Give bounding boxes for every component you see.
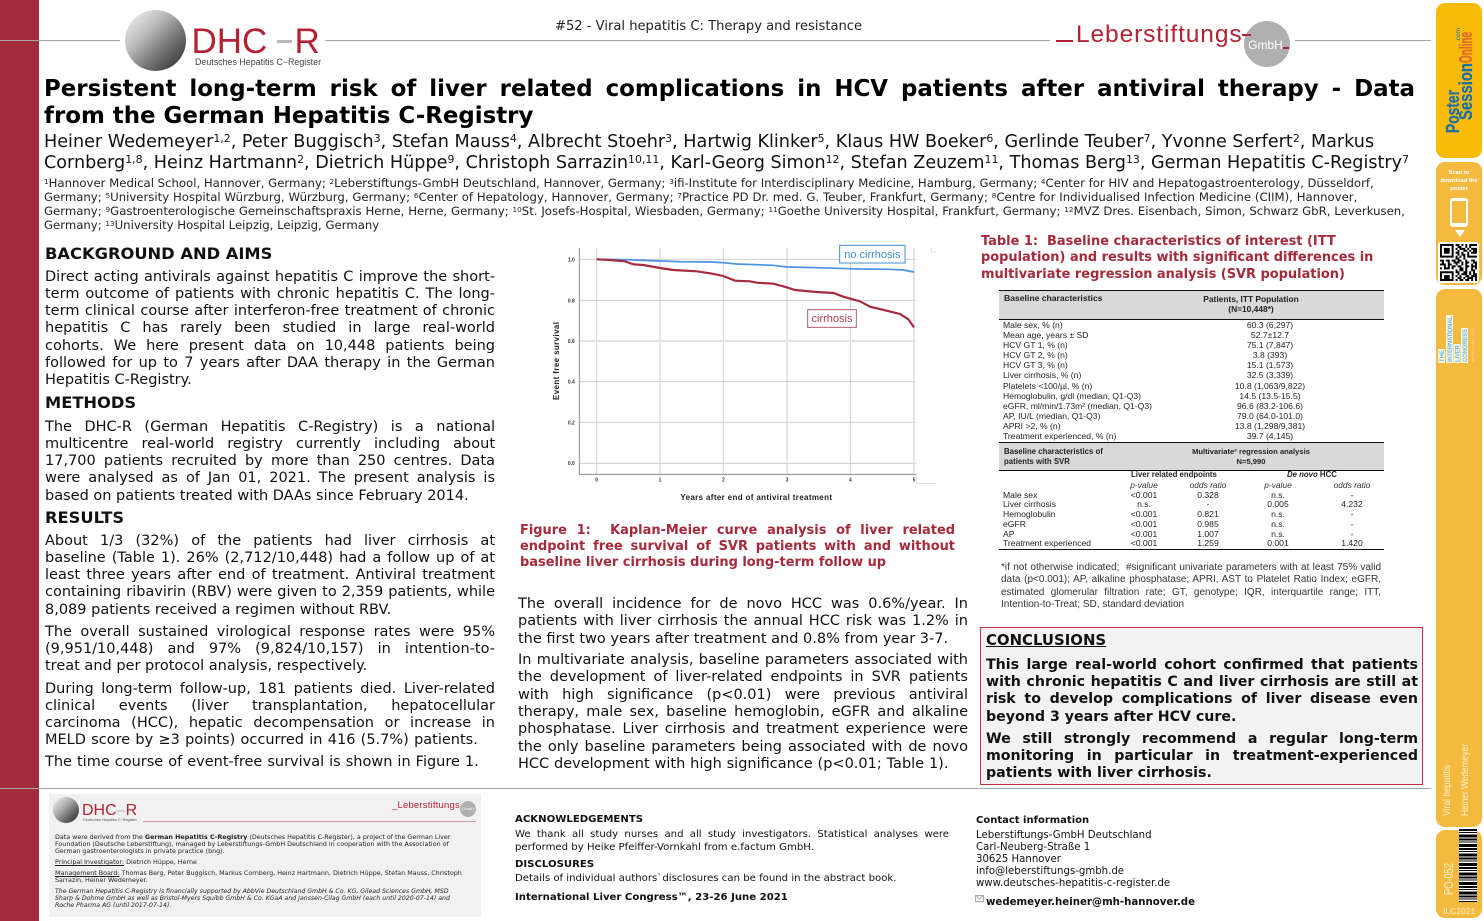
side panel: congress and topic bbox=[1436, 289, 1482, 827]
panel: conclusions bbox=[980, 627, 1423, 785]
scan caption bbox=[1436, 169, 1482, 193]
curve: no cirrhosis bbox=[597, 259, 914, 272]
contact details: Carl-Neuberg-Straße 1 bbox=[976, 842, 1090, 853]
x axis tick labels bbox=[595, 478, 916, 484]
label: no cirrhosis bbox=[840, 245, 905, 263]
text: methods: multicentre real-world registry currently including about bbox=[45, 436, 495, 452]
congress name: International Liver Congress™, 23-26 June 2021 bbox=[515, 892, 788, 902]
row labels: Treatment experienced, % (n) bbox=[1003, 431, 1116, 441]
affiliations bbox=[44, 176, 1405, 232]
multivariate column 4 bbox=[1341, 490, 1363, 548]
table caption: Table 1: Baseline characteristics of interest (ITT bbox=[981, 234, 1336, 248]
panel: registry information bbox=[49, 794, 481, 917]
multivariate column 1: <0.001 bbox=[1131, 538, 1157, 548]
y axis tick labels: 0.6 bbox=[568, 339, 575, 345]
R wordmark: R bbox=[294, 22, 320, 60]
row labels: Male sex, % (n) bbox=[1003, 320, 1063, 330]
figure caption: baseline liver cirrhosis during long-term follow up bbox=[520, 554, 886, 570]
y axis tick labels: 0.4 bbox=[568, 380, 575, 386]
multivariate column 2 bbox=[1197, 490, 1219, 548]
contact heading: Contact information bbox=[976, 815, 1089, 826]
x axis tick labels: 1 bbox=[659, 478, 662, 484]
registry description: Foundation (Deutsche Leberstiftung), managed by Leberstiftungs-GmbH Deutschland in cooperation with the Association of bbox=[55, 841, 449, 848]
text: multivariate analysis: with high significance (p<0.01) were previous antiviral bbox=[518, 687, 968, 703]
text: results paragraph 2: The overall sustained virological response rates were 95% bbox=[45, 624, 495, 640]
contact details bbox=[976, 830, 1170, 889]
congress logo: THE bbox=[1440, 350, 1446, 362]
text: HCC incidence: the first two years after treatment and 0.8% from year 3-7. bbox=[518, 631, 948, 647]
mini DHC-R wordmark: DHC–R bbox=[82, 802, 137, 819]
side panel: scan to download bbox=[1436, 162, 1482, 285]
header 2 left: patients with SVR bbox=[1004, 457, 1070, 466]
multivariate column 1: <0.001 bbox=[1131, 528, 1157, 538]
mini grey circle bbox=[460, 801, 476, 817]
contact details: 30625 Hannover bbox=[976, 854, 1061, 865]
text: results paragraph 4: The time course of event-free survival is shown in Figure 1. bbox=[45, 754, 479, 770]
text: results paragraph 2: treat and per protocol analysis, respectively. bbox=[45, 658, 367, 674]
row values: 60.3 (6,297) bbox=[1247, 320, 1293, 330]
multivariate column 4: - bbox=[1351, 528, 1353, 538]
row values: 96.6 (83.2-106.6) bbox=[1237, 401, 1303, 411]
row values: 3.8 (393) bbox=[1253, 350, 1287, 360]
figure caption: Figure 1: Kaplan-Meier curve analysis of liver related bbox=[520, 522, 955, 538]
figure caption bbox=[520, 522, 955, 570]
row values: 15.1 (1,573) bbox=[1247, 360, 1293, 370]
header 2 right bbox=[1192, 447, 1310, 466]
row labels: eGFR, ml/min/1.73m² (median, Q1-Q3) bbox=[1003, 401, 1152, 411]
multivariate column 3: n.s. bbox=[1271, 490, 1285, 500]
congress logo: 18-26 JUNE 2021 bbox=[1470, 327, 1475, 362]
row labels: Liver cirrhosis, % (n) bbox=[1003, 370, 1081, 380]
contact email: wedemeyer.heiner@mh-hannover.de bbox=[986, 897, 1195, 908]
topic text: Viral hepatitis bbox=[1441, 765, 1453, 816]
table caption bbox=[981, 234, 1373, 282]
text: background bbox=[45, 268, 495, 388]
sub headers: p-value bbox=[1264, 480, 1292, 490]
text: multivariate analysis: phosphatase. Liver cirrhosis and treatment experience were bbox=[518, 721, 968, 737]
row values: 79.0 (64.0-101.0) bbox=[1237, 411, 1303, 421]
text: methods: based on patients treated with DAAs since February 2014. bbox=[45, 488, 469, 504]
y axis title: Event free survival bbox=[552, 322, 561, 400]
row labels: Hemoglobulin, g/dl (median, Q1-Q3) bbox=[1003, 391, 1141, 401]
contact details: info@leberstiftungs-gmbh.de bbox=[976, 866, 1124, 877]
header band 2 bbox=[999, 442, 1384, 471]
logo dash bbox=[1056, 40, 1073, 42]
left red sidebar bbox=[0, 0, 39, 921]
affiliations: Germany; 5University Hospital Würzburg, Würzburg, Germany; 6Center of Hepatology, Hannover, Germany; 7Practice PD Dr. med. G. Teuber, Frankfurt, Germany; 8Centre for Individualised Infection Medicine (CIIM), Hannover, bbox=[44, 190, 1357, 204]
multivariate column 3: n.s. bbox=[1271, 528, 1285, 538]
multivariate column 4: - bbox=[1351, 490, 1353, 500]
text: background: Direct acting antivirals against hepatitis C improve the short- bbox=[45, 268, 495, 284]
acknowledgements text: We thank all study nurses and all study investigators. Statistical analyses were bbox=[515, 829, 949, 840]
management board: Sarrazin, Heiner Wedemeyer. bbox=[55, 877, 148, 884]
header 2 right: N=5,990 bbox=[1237, 457, 1265, 466]
header 1 right: (N=10,448*) bbox=[1228, 304, 1274, 314]
icon: down arrow bbox=[1455, 230, 1465, 237]
congress logo: LIVER bbox=[1456, 344, 1462, 362]
funding note: The German Hepatitis C-Registry is financially supported by AbbVie Deutschland GmbH & Co. KG, Gilead Sciences GmbH, MSD bbox=[55, 888, 449, 894]
multivariate column 2: 1.007 bbox=[1197, 528, 1219, 538]
multivariate row labels: eGFR bbox=[1003, 519, 1026, 529]
table footnote: estimated glomerular filtration rate; GT, genotype; IQR, interquartile range; ITT, bbox=[1001, 587, 1381, 598]
header 1 right bbox=[1203, 294, 1299, 314]
multivariate column 2: - bbox=[1207, 499, 1209, 509]
conclusions text 1: with chronic hepatitis C and liver cirrhosis are still at bbox=[986, 674, 1418, 690]
principal investigator: Principal Investigator: Dietrich Hüppe, Herne bbox=[55, 859, 197, 866]
authors: Cornberg1,8, Heinz Hartmann2, Dietrich Hüppe9, Christoph Sarrazin10,11, Karl-Georg Simon12, Stefan Zeuzem11, Thomas Berg13, German Hepatitis C-Registry7 bbox=[44, 153, 1409, 173]
text: multivariate analysis bbox=[518, 652, 968, 772]
y axis tick labels: 1.0 bbox=[568, 257, 575, 263]
conclusions text 2 bbox=[986, 730, 1418, 781]
brand wordmark bbox=[1436, 3, 1482, 158]
icon: grey sphere bbox=[125, 10, 186, 71]
multivariate column 4: 1.420 bbox=[1341, 538, 1363, 548]
text: multivariate analysis: the development of liver-related endpoints in SVR patients bbox=[518, 669, 968, 685]
acknowledgements text: performed by Heike Pfeiffer-Vornkahl from e.factum GmbH. bbox=[515, 842, 814, 853]
mini grey circle: GmbH bbox=[462, 806, 474, 811]
text: results paragraph 3 bbox=[45, 680, 495, 748]
label: cirrhosis bbox=[808, 310, 856, 327]
row values bbox=[1235, 320, 1305, 441]
text: multivariate analysis: therapy, male sex, baseline hemoglobin, eGFR and alkaline bbox=[518, 704, 968, 720]
row values: 52.7±12.7 bbox=[1251, 330, 1289, 340]
header 2 left: Baseline characteristics of bbox=[1004, 447, 1103, 456]
x axis title: Years after end of antiviral treatment bbox=[680, 493, 832, 502]
text: results paragraph 1: baseline (Table 1). 26% (2,712/10,448) had a follow up of at bbox=[45, 550, 495, 566]
heading: methods: METHODS bbox=[45, 393, 136, 412]
management board bbox=[55, 870, 462, 884]
text: methods: 17,700 patients recruited by more than 250 centres. Data bbox=[45, 453, 495, 469]
text: results paragraph 1 bbox=[45, 532, 495, 618]
row values: 75.1 (7,847) bbox=[1247, 340, 1293, 350]
conclusions text 1 bbox=[986, 656, 1418, 725]
text: results paragraph 2 bbox=[44, 624, 495, 674]
y axis tick labels: 0.2 bbox=[568, 420, 575, 426]
text: multivariate analysis: HCC development with high significance (p<0.01; Table 1). bbox=[518, 756, 948, 772]
x axis tick labels: 4 bbox=[849, 478, 852, 484]
header 2 right: Multivariate# regression analysis bbox=[1192, 447, 1310, 456]
affiliations: 1Hannover Medical School, Hannover, Germany; 2Leberstiftungs-GmbH Deutschland, Hannover, Germany; 3ifi-Institute for Interdisciplinary Medicine, Hamburg, Germany; 4Center for HIV and Hepatogastroenterology, Düsseldorf, bbox=[44, 176, 1374, 190]
row labels: APRI >2, % (n) bbox=[1003, 421, 1061, 431]
multivariate row labels: Hemoglobulin bbox=[1003, 509, 1056, 519]
logo: DHC-R bbox=[125, 10, 321, 71]
text: results paragraph 2: (9,951/10,448) and 97% (9,824/10,157) in intention-to- bbox=[45, 641, 495, 657]
congress logo: INTERNATIONAL bbox=[1448, 316, 1454, 362]
logo hyphen bbox=[1242, 34, 1251, 36]
table footnote: *if not otherwise indicated; #significant univariate parameters with at least 75% valid bbox=[1001, 562, 1381, 573]
barcode bbox=[1459, 829, 1477, 902]
conclusions text 2: patients with liver cirrhosis. bbox=[986, 765, 1212, 781]
heading: background and aims: BACKGROUND AND AIMS bbox=[45, 244, 272, 263]
multivariate column 1: <0.001 bbox=[1131, 490, 1157, 500]
multivariate column 3: 0.005 bbox=[1267, 499, 1289, 509]
multivariate column 1: <0.001 bbox=[1131, 519, 1157, 529]
affiliations: Germany; 13University Hospital Leipzig, Leipzig, Germany bbox=[44, 218, 379, 232]
funding note: Sharp & Dohme GmbH as well as Bristol-Myers Squibb GmbH & Co. KGaA and Janssen-Cilag GmbH (each until 2020-07-14) and bbox=[55, 895, 450, 902]
row labels: AP, IU/L (median, Q1-Q3) bbox=[1003, 411, 1100, 421]
multivariate column 4: - bbox=[1351, 519, 1353, 529]
multivariate column 2: 0.985 bbox=[1197, 519, 1219, 529]
sub headers bbox=[1130, 480, 1370, 490]
conclusions text 1: This large real-world cohort confirmed that patients bbox=[986, 656, 1418, 672]
table footnote: Intention-to-Treat; SD, standard deviation bbox=[1001, 599, 1184, 610]
logo: Leberstiftungs-GmbH bbox=[1056, 21, 1290, 67]
y axis tick labels: 0.0 bbox=[568, 461, 575, 467]
management board: Management Board: Thomas Berg, Peter Buggisch, Markus Cornberg, Heinz Hartmann, Dietrich Hüppe, Stefan Mauss, Christoph bbox=[55, 870, 462, 877]
text: results paragraph 3: clinical events (liver transplantation, hepatocellular bbox=[45, 698, 495, 714]
header 1 left: Baseline characteristics bbox=[1004, 293, 1102, 303]
poster ID: PO-052 bbox=[1441, 863, 1456, 895]
conclusions text 2: monitoring in particular in treatment-experienced bbox=[986, 748, 1418, 764]
title bbox=[44, 76, 1415, 129]
title: from the German Hepatitis C-Registry bbox=[44, 103, 533, 129]
header band 1 bbox=[999, 290, 1384, 320]
brand wordmark: .com bbox=[1456, 28, 1462, 42]
y axis tick labels bbox=[568, 257, 575, 467]
row values: 13.8 (1,298/9,381) bbox=[1235, 421, 1305, 431]
contact details: www.deutsches-hepatitis-c-register.de bbox=[976, 878, 1170, 889]
multivariate row labels bbox=[1003, 490, 1091, 548]
logo grey dash bbox=[277, 40, 292, 42]
grey circle GmbH: GmbH bbox=[1248, 38, 1283, 52]
multivariate column 4: 4.232 bbox=[1341, 499, 1363, 509]
text: background: hepatitis C has rarely been studied in large real-world bbox=[45, 320, 495, 336]
mini Leberstiftungs wordmark: _Leberstiftungs bbox=[392, 800, 460, 811]
header 2 left bbox=[1004, 447, 1103, 466]
multivariate column 1: <0.001 bbox=[1131, 509, 1157, 519]
text: background: Hepatitis C-Registry. bbox=[45, 372, 192, 388]
multivariate row labels: AP bbox=[1003, 528, 1014, 538]
registry description: Data were derived from the German Hepatitis C-Registry (Deutsches Hepatitis C-Register), a project of the German Liver bbox=[55, 834, 450, 841]
table footnote: data (p<0.001); AP, alkaline phosphatase; APRI, AST to Platelet Ratio Index; eGFR, bbox=[1001, 574, 1381, 585]
multivariate column 3: n.s. bbox=[1271, 509, 1285, 519]
multivariate column 2: 1.259 bbox=[1197, 538, 1219, 548]
QR code bbox=[1438, 242, 1479, 283]
conclusions text 1: beyond 3 years after HCV cure. bbox=[986, 709, 1236, 725]
text: results paragraph 1: About 1/3 (32%) of the patients had liver cirrhosis at bbox=[45, 532, 495, 548]
text: methods: The DHC-R (German Hepatitis C-Registry) is a national bbox=[45, 418, 495, 434]
text: background: term clinical course after interferon-free treatment of chronic bbox=[45, 303, 495, 319]
text: multivariate analysis: In multivariate analysis, baseline parameters associated with bbox=[518, 652, 968, 668]
group headers: Liver related endpoints bbox=[1131, 470, 1217, 478]
multivariate column 1 bbox=[1131, 490, 1157, 548]
title: Persistent long-term risk of liver related complications in HCV patients after antiviral therapy - Data bbox=[44, 76, 1415, 102]
mini rule bbox=[143, 821, 476, 822]
conference track label: #52 - Viral hepatitis C: Therapy and resistance bbox=[555, 19, 862, 34]
header 1 right: Patients, ITT Population bbox=[1203, 294, 1299, 304]
row labels: HCV GT 1, % (n) bbox=[1003, 340, 1068, 350]
conclusions heading: CONCLUSIONS bbox=[986, 631, 1106, 649]
conclusions text 1: risk to develop complications of liver disease even bbox=[986, 691, 1418, 707]
side panel: poster number bbox=[1436, 830, 1482, 918]
brand wordmark: Online bbox=[1456, 32, 1476, 63]
affiliations: Germany; 9Gastroenterologische Gemeinschaftspraxis Herne, Herne, Germany; 10St. Josefs-Hospital, Wiesbaden, Germany; 11Goethe University Hospital, Frankfurt, Germany; 12MVZ Dres. Eisenbach, Simon, Schwarz GbR, Leverkusen, bbox=[44, 204, 1405, 218]
text: results paragraph 1: least three years after end of treatment. Antiviral treatment bbox=[45, 567, 495, 583]
logo subtitle: Deutsches Hepatitis C−Register bbox=[195, 57, 321, 67]
mini logo subtitle: Deutsches Hepatitis C−Register bbox=[83, 818, 137, 822]
funding note: Roche Pharma AG (until 2017-07-14). bbox=[55, 902, 171, 909]
label: cirrhosis: cirrhosis bbox=[812, 313, 853, 325]
multivariate column 3: n.s. bbox=[1271, 519, 1285, 529]
text: results paragraph 3: carcinoma (HCC), hepatic decompensation or increase in bbox=[45, 715, 495, 731]
registry description bbox=[55, 834, 450, 855]
acknowledgements text bbox=[515, 829, 949, 853]
heading: results: RESULTS bbox=[45, 508, 124, 527]
table: baseline characteristics bbox=[999, 290, 1384, 550]
Leberstiftungs wordmark: Leberstiftungs bbox=[1076, 21, 1243, 48]
multivariate column 3: 0.001 bbox=[1267, 538, 1289, 548]
row values: 14.5 (13.5-15.5) bbox=[1239, 391, 1301, 401]
funding note bbox=[55, 888, 450, 909]
conclusions text 2: We still strongly recommend a regular long-term bbox=[986, 730, 1418, 746]
multivariate column 1: n.s. bbox=[1137, 499, 1151, 509]
topic text bbox=[1436, 729, 1482, 819]
row labels: HCV GT 3, % (n) bbox=[1003, 360, 1068, 370]
row labels bbox=[1003, 320, 1152, 441]
congress code: ILC2021 bbox=[1443, 907, 1475, 916]
icon: phone bbox=[1450, 198, 1468, 227]
text: results paragraph 3: During long-term follow-up, 181 patients died. Liver-related bbox=[45, 680, 495, 696]
x axis tick labels: 5 bbox=[913, 478, 916, 484]
row values: 32.5 (3,339) bbox=[1247, 370, 1293, 380]
brand wordmark: Session bbox=[1456, 63, 1476, 120]
row labels: Platelets <100/µl, % (n) bbox=[1003, 381, 1092, 391]
contact details: Leberstiftungs-GmbH Deutschland bbox=[976, 830, 1152, 841]
text: HCC incidence: patients with liver cirrhosis the annual HCC risk was 1.2% in bbox=[518, 613, 968, 629]
registry description: German gastroenterologists in private practice (bng). bbox=[55, 848, 225, 855]
DHC wordmark: DHC bbox=[192, 22, 267, 60]
text: HCC incidence: The overall incidence for de novo HCC was 0.6%/year. In bbox=[518, 596, 968, 612]
text: methods bbox=[44, 418, 495, 504]
scan caption: download the bbox=[1440, 178, 1478, 184]
multivariate column 2: 0.821 bbox=[1197, 509, 1219, 519]
multivariate column 2: 0.328 bbox=[1197, 490, 1219, 500]
disclosures text: Details of individual authors`disclosures can be found in the abstract book. bbox=[515, 872, 897, 884]
table caption: population) and results with significant differences in bbox=[981, 250, 1373, 265]
text: background: followed for up to 7 years after DAA therapy in the German bbox=[45, 355, 495, 371]
table caption: multivariate regression analysis (SVR population) bbox=[981, 267, 1345, 282]
table footnote bbox=[1001, 562, 1381, 610]
sub headers: odds ratio bbox=[1190, 480, 1226, 490]
x axis tick labels: 2 bbox=[722, 478, 725, 484]
multivariate column 4: - bbox=[1351, 509, 1353, 519]
text: HCC incidence bbox=[518, 596, 968, 647]
row labels: HCV GT 2, % (n) bbox=[1003, 350, 1068, 360]
scan caption: Scan to bbox=[1449, 170, 1469, 176]
group header de novo HCC: De novo HCC bbox=[1287, 470, 1337, 478]
label: no cirrhosis: no cirrhosis bbox=[844, 249, 901, 261]
text: methods: were analysed as of Jan 01, 2021. The present analysis is bbox=[45, 470, 495, 486]
x axis tick labels: 3 bbox=[786, 478, 789, 484]
multivariate column 3 bbox=[1267, 490, 1289, 548]
row values: 10.8 (1,063/9,822) bbox=[1235, 381, 1305, 391]
multivariate row labels: Male sex bbox=[1003, 490, 1037, 500]
figure caption: endpoint free survival of SVR patients with and without bbox=[520, 538, 955, 554]
mini sphere logo bbox=[53, 797, 79, 823]
congress logo: CONGRESS bbox=[1463, 329, 1469, 362]
text: multivariate analysis: the only baseline parameters being associated with de novo bbox=[518, 739, 968, 755]
row labels: Mean age, years ± SD bbox=[1003, 330, 1088, 340]
logo end dash bbox=[1283, 47, 1289, 49]
text: background: term outcome of patients with chronic hepatitis C. The long- bbox=[45, 286, 495, 302]
y axis tick labels: 0.8 bbox=[568, 298, 575, 304]
text: results paragraph 3: MELD score by ≥3 points) occurred in 416 (5.7%) patients. bbox=[45, 732, 478, 748]
congress logo bbox=[1436, 289, 1482, 379]
disclosures heading: DISCLOSURES bbox=[515, 858, 594, 870]
authors bbox=[44, 132, 1409, 173]
authors: Heiner Wedemeyer1,2, Peter Buggisch3, Stefan Mauss4, Albrecht Stoehr3, Hartwig Klinker5, Klaus HW Boeker6, Gerlinde Teuber7, Yvonne Serfert2, Markus bbox=[44, 132, 1374, 152]
icon: envelope bbox=[975, 895, 984, 902]
multivariate row labels: Treatment experienced bbox=[1003, 538, 1091, 548]
sub headers: odds ratio bbox=[1334, 480, 1370, 490]
grey circle GmbH bbox=[1244, 21, 1290, 67]
multivariate row labels: Liver cirrhosis bbox=[1003, 499, 1056, 509]
side panel: PosterSessionOnline bbox=[1436, 3, 1482, 158]
scan caption: poster bbox=[1450, 186, 1468, 192]
text: background: cohorts. We here present data on 10,448 patients being bbox=[45, 338, 495, 354]
row values: 39.7 (4,145) bbox=[1247, 431, 1293, 441]
brand wordmark: Poster bbox=[1443, 90, 1463, 133]
x axis tick labels: 0 bbox=[595, 478, 598, 484]
table bottom rule bbox=[999, 548, 1384, 550]
text: results paragraph 1: containing ribavirin (RBV) were given to 2,359 patients, while bbox=[45, 584, 495, 600]
text: results paragraph 1: 8,089 patients received a regimen without RBV. bbox=[45, 602, 391, 618]
curve: cirrhosis bbox=[597, 259, 914, 327]
sub headers: p-value bbox=[1130, 480, 1158, 490]
acknowledgements heading: ACKNOWLEDGEMENTS bbox=[515, 814, 643, 824]
chart: Kaplan-Meier curve bbox=[552, 244, 936, 502]
